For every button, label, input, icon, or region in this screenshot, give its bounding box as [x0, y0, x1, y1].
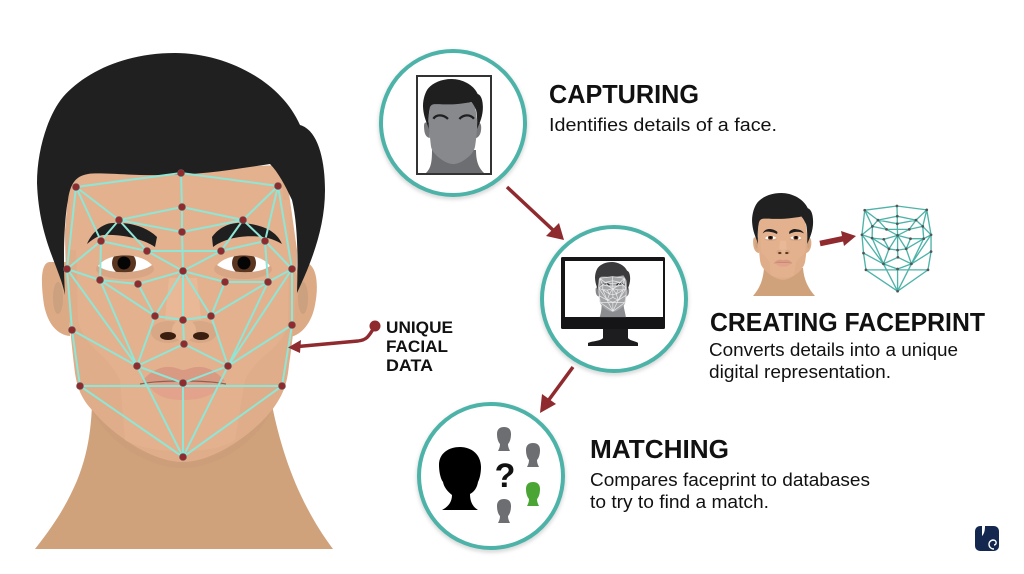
text: creating faceprint description: Converts details into a unique: [709, 340, 958, 360]
text: creating faceprint description: [709, 340, 958, 382]
candidate silhouettes: [497, 427, 540, 523]
small mesh: [861, 205, 932, 292]
arrow to mesh: [820, 231, 856, 246]
photo frame with grey face: [417, 76, 491, 174]
heading: capturing: CAPTURING: [549, 79, 699, 109]
panel: creating faceprint icon: [542, 227, 686, 373]
panel: matching icon: [419, 404, 563, 550]
landmark points: [64, 170, 296, 460]
faceprint illustration: [752, 193, 932, 296]
small face: [752, 193, 815, 296]
callout text: FACIAL: [386, 338, 448, 356]
icon: elephant logo: [975, 526, 999, 551]
heading: creating faceprint: CREATING FACEPRINT: [710, 307, 985, 337]
text: matching description: to try to find a match.: [590, 492, 769, 512]
monitor with scanned face: [561, 257, 665, 346]
callout text: UNIQUE: [386, 319, 453, 337]
text: creating faceprint description: digital representation.: [709, 362, 891, 382]
panel: capturing icon: [381, 51, 525, 197]
question mark: ?: [495, 457, 515, 495]
text: matching description: [590, 470, 870, 512]
text: matching description: Compares faceprint to databases: [590, 470, 870, 490]
head with hair and features: [37, 53, 325, 462]
large silhouette: [439, 447, 481, 510]
heading: matching: MATCHING: [590, 434, 729, 464]
arrow: capturing to creating: [507, 187, 564, 240]
neck: [35, 405, 333, 549]
facial landmark mesh: [67, 173, 292, 457]
text: capturing description: Identifies details of a face.: [549, 115, 777, 135]
callout arrow: [288, 320, 380, 353]
callout: unique facial data: [288, 319, 453, 375]
illustration: face with facial mesh: [35, 53, 333, 549]
callout text: [386, 319, 453, 375]
arrow: creating to matching: [540, 367, 573, 413]
callout text: DATA: [386, 357, 433, 375]
